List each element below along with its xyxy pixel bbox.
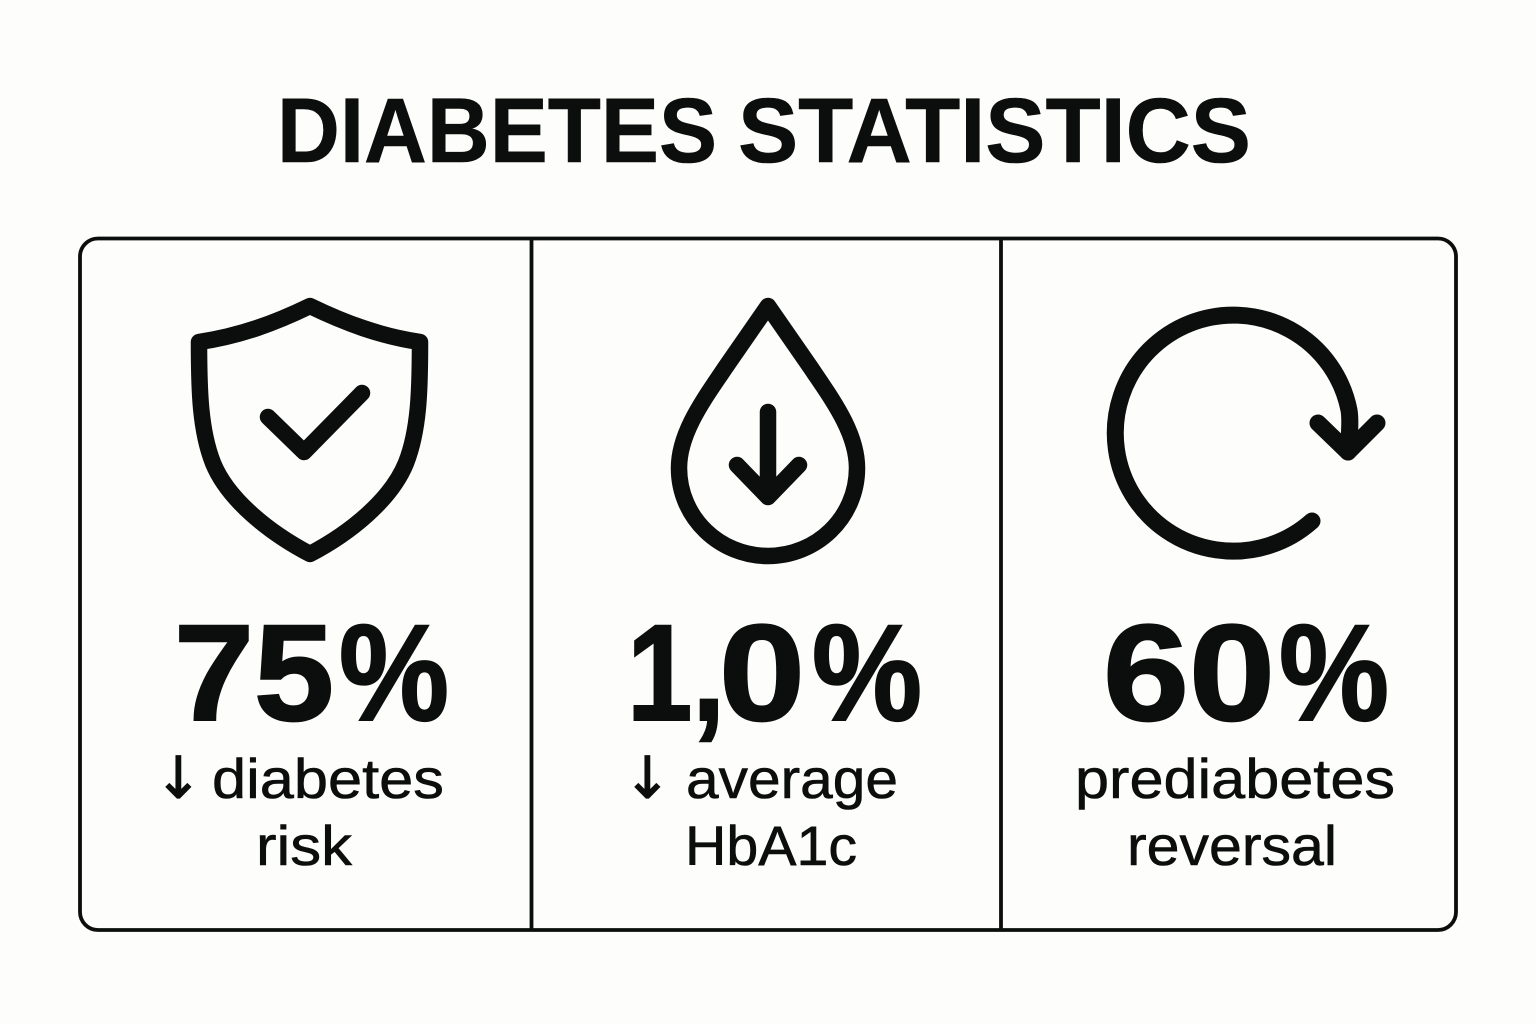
panel: average HbA1c <box>623 306 922 877</box>
icon: circular arrow <box>1115 315 1377 551</box>
title: STATISTICS <box>738 80 1251 182</box>
label: average HbA1c: average <box>686 747 898 810</box>
label: diabetes risk: ↓ <box>154 744 203 812</box>
stat: 1,0%: 0 <box>719 597 805 750</box>
label: prediabetes reversal: reversal <box>1127 814 1337 877</box>
label: average HbA1c: ↓ <box>623 744 672 812</box>
title: DIABETES <box>277 80 717 182</box>
stat: 1,0%: % <box>812 597 922 750</box>
label: prediabetes reversal <box>1075 747 1395 877</box>
stat: 75%: % <box>339 597 449 750</box>
icon: shield with check <box>199 306 420 554</box>
panel: diabetes risk <box>154 306 449 877</box>
label: prediabetes reversal: prediabetes <box>1075 747 1395 810</box>
label: average HbA1c <box>623 744 898 877</box>
icon: drop with down arrow <box>679 306 857 556</box>
label: diabetes risk <box>154 744 444 877</box>
label: diabetes risk: diabetes <box>212 747 444 810</box>
panel: prediabetes reversal <box>1075 315 1395 877</box>
label: diabetes risk: risk <box>256 814 353 877</box>
stat: 1,0%: 1, <box>627 597 725 750</box>
stat: 75%: 75 <box>174 597 334 750</box>
panel frame <box>80 238 1456 930</box>
stat: 60%: 60 <box>1103 597 1275 750</box>
label: average HbA1c: HbA1c <box>685 814 857 877</box>
stat: 60%: % <box>1279 597 1389 750</box>
